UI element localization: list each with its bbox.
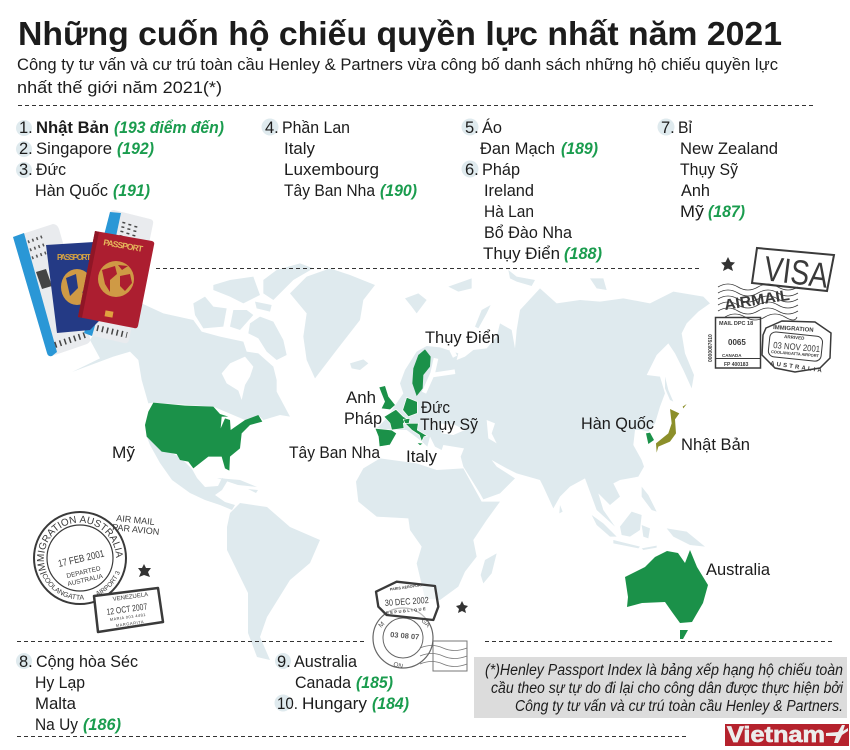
stamp: Venezuela: VENEZUELA <box>112 592 149 603</box>
stamp: 30 Dec 2002: PARIS AÉROPORT <box>389 582 424 592</box>
map: Italy <box>405 423 427 446</box>
stamp: air mail par avion: AIR MAIL <box>116 513 155 527</box>
stamp: air mail par avion <box>112 513 160 537</box>
intro text: nhất thế giới năm 2021(*) <box>17 79 222 97</box>
ranking list: 4: Luxembourg <box>284 161 379 179</box>
stamp: circular immigration Australia: DEPARTED <box>66 565 102 580</box>
stamp: Canada <box>708 318 760 368</box>
ranking list: 4 <box>262 118 417 200</box>
ranking list: 1 to 3: 2. <box>19 140 33 158</box>
icon: boarding passes and passports <box>13 210 154 356</box>
ranking list: 5 and 6: (189) <box>561 140 598 158</box>
ranking list: 9 and 10: Australia <box>294 653 358 671</box>
icon: blue passport: PASSPORT <box>57 253 91 262</box>
stamp: Venezuela: MARIA 003 4481 <box>109 612 147 622</box>
stamp: circular postmark: GA <box>420 617 432 630</box>
ranking list: 7: Mỹ <box>680 203 705 221</box>
map: Đức <box>403 397 417 417</box>
ranking list: 9 and 10: 10. <box>277 695 298 713</box>
map labels: Thụy Điển <box>425 329 500 347</box>
map labels: Nhật Bản <box>681 436 750 454</box>
ranking list: 1 to 3: Nhật Bản <box>36 119 109 137</box>
stamp: Venezuela <box>94 588 163 632</box>
ranking list: 9 and 10: 9. <box>277 653 291 671</box>
logo: Vietnam+ <box>725 722 849 747</box>
stamp: circular postmark: M <box>377 621 386 629</box>
stamp: AIRMAIL: AIRMAIL <box>723 287 791 314</box>
stamp: circular postmark: 03 08 07 <box>390 630 420 642</box>
ranking list: 1 to 3: 3. <box>19 161 33 179</box>
map: Mỹ <box>145 403 262 471</box>
ranking list: 1 to 3: Đức <box>36 161 66 179</box>
map labels: Pháp <box>344 410 382 428</box>
ranking list: 7: Bỉ <box>678 119 692 137</box>
ranking list: 1 to 3: Singapore <box>36 140 112 158</box>
ranking list: 4: Phần Lan <box>282 119 350 137</box>
map: European countries <box>375 349 687 453</box>
ranking list: 8: 8. <box>19 653 33 671</box>
ranking list: 5 and 6: Pháp <box>482 161 520 179</box>
ranking list: 1 to 3: 1. <box>19 119 33 137</box>
ranking list: 5 and 6: Áo <box>482 118 502 137</box>
map: Tây Ban Nha <box>375 428 397 447</box>
stamp: wavy postmark lines <box>718 284 798 320</box>
ranking list: 1 to 3: (193 điểm đến) <box>114 119 224 137</box>
ranking list: 1 to 3 <box>16 119 224 200</box>
stamp: 30 Dec 2002 <box>376 582 438 620</box>
map labels: Australia <box>706 561 771 579</box>
icon: star <box>138 564 151 577</box>
map: Greenland <box>290 268 375 378</box>
map: South America <box>227 503 320 660</box>
map: Africa and islands <box>356 458 563 600</box>
ranking list: 8: Hy Lạp <box>35 674 85 692</box>
stamp: Australia immigration: ARRIVED <box>784 334 805 341</box>
map labels <box>112 329 771 579</box>
icon: red passport <box>78 231 154 328</box>
icon: right boarding pass <box>84 210 153 343</box>
icon: red passport: PASSPORT <box>103 237 145 254</box>
map: Arctic Russian islands and Svalbard <box>405 270 673 402</box>
stamp: circular immigration Australia: AUSTRALIA <box>67 573 104 588</box>
stamp: VISA: VISA <box>762 249 831 296</box>
stamps: visa, airmail, Canada, Australia <box>708 248 834 374</box>
stamps: immigration Australia, air mail, Venezuela <box>33 511 164 634</box>
ranking list: 1 to 3: (191) <box>113 182 150 200</box>
ranking list: 4: (190) <box>380 182 417 200</box>
stamp: Venezuela: 12 OCT 2007 <box>106 601 148 617</box>
map: Thụy Điển <box>412 349 431 396</box>
map: Mexico and Central America <box>147 437 235 510</box>
map: Thụy Sỹ <box>403 418 410 423</box>
ranking list: 7 <box>658 118 778 221</box>
stamps: 30 Dec 2002, circular, wavy <box>373 582 468 671</box>
stamp: Australia immigration: IMMIGRATION <box>773 325 814 334</box>
ranking list: 5 and 6: 5. <box>465 119 479 137</box>
icon: star <box>456 601 468 613</box>
footnote box <box>474 657 847 718</box>
ranking list: 4: Tây Ban Nha <box>284 182 376 200</box>
ranking list: 8 <box>16 653 138 734</box>
stamp: Canada: FP 400183 <box>724 362 749 368</box>
ranking list: 9 and 10: (184) <box>372 695 409 713</box>
ranking list: 5 and 6: 6. <box>465 161 479 179</box>
map labels: Đức <box>421 399 450 417</box>
stamp: 30 Dec 2002: REPUBLIQUE <box>386 606 426 615</box>
stamp: circular immigration Australia: AIRPORT 3186 <box>96 571 120 594</box>
ranking list: 7: (187) <box>708 203 745 221</box>
stamp: Canada: 0065 <box>728 338 746 347</box>
stamp: circular immigration Australia <box>33 511 127 605</box>
ranking list: 9 and 10: (185) <box>356 674 393 692</box>
icon: left boarding pass <box>13 224 90 356</box>
stamp: Australia immigration: 03 NOV 2001 <box>773 340 821 354</box>
stamp: Australia immigration <box>762 321 831 374</box>
ranking list: 5 and 6: (188) <box>564 245 602 263</box>
ranking list: 9 and 10 <box>274 653 409 713</box>
map: Nhật Bản <box>656 404 687 453</box>
ranking list: 7: 7. <box>661 119 675 137</box>
stamp: air mail par avion: PAR AVION <box>112 522 160 537</box>
map: Hudson Bay <box>222 357 253 400</box>
stamp: circular postmark <box>373 608 433 671</box>
ranking list: 1 to 3: (192) <box>117 140 154 158</box>
ranking list: 8: Na Uy <box>35 716 79 734</box>
stamp: Canada: CANADA <box>722 353 742 358</box>
map: Caribbean <box>217 478 258 493</box>
ranking list: 8: Malta <box>35 695 77 713</box>
ranking list: 7: Anh <box>681 182 710 200</box>
map: Australia <box>625 550 708 639</box>
ranking list: 5 and 6 <box>462 118 602 263</box>
ranking list: 5 and 6: Thụy Điển <box>483 245 560 263</box>
ranking list: 5 and 6: Bổ Đào Nha <box>484 224 573 242</box>
map: Iceland <box>350 359 368 370</box>
stamp: circular immigration Australia: 17 FEB 2001 <box>57 549 106 570</box>
ranking list: 7: Thụy Sỹ <box>680 161 739 179</box>
ranking list: 7: New Zealand <box>680 140 778 158</box>
map labels: Tây Ban Nha <box>289 444 381 462</box>
ranking list: 1 to 3: Hàn Quốc <box>35 182 108 200</box>
stamp: Canada: MAIL DPC 18 <box>719 321 753 327</box>
title: Những cuốn hộ chiếu quyền lực nhất năm 2021 <box>18 15 782 52</box>
map: Southeast Asia islands <box>592 487 705 550</box>
ranking list: 9 and 10: Canada <box>295 674 352 692</box>
logo: Vietnam+: Vietnam <box>727 722 825 747</box>
stamp: circular immigration Australia: COOLANGATTA <box>42 574 84 600</box>
map labels: Italy <box>406 448 438 466</box>
ranking list: 8: Cộng hòa Séc <box>36 653 138 671</box>
ranking list: 4: 4. <box>265 119 279 137</box>
stamp: Canada: 0000087610 <box>708 334 714 362</box>
world map <box>72 263 710 660</box>
map: Anh <box>379 386 395 409</box>
ranking list: 8: (186) <box>83 716 121 734</box>
ranking list: 5 and 6: Ireland <box>484 182 534 200</box>
stamp: Venezuela: MARGARITA <box>115 619 144 628</box>
stamp: Australia immigration: AUSTRALIA <box>770 361 823 374</box>
ranking list: 4: Italy <box>284 140 316 158</box>
map labels: Hàn Quốc <box>581 415 654 433</box>
map: Pháp <box>384 409 408 430</box>
stamp: wavy postmark box <box>420 641 467 671</box>
map: Black Sea, Caspian, Baltic <box>440 420 497 443</box>
stamp: circular immigration Australia: IMMIGRATION AUSTRALIA <box>37 516 123 575</box>
map labels: Thụy Sỹ <box>420 416 479 434</box>
ranking list: 5 and 6: Hà Lan <box>484 203 534 221</box>
stamp: 30 Dec 2002: 30 DEC 2002 <box>384 595 429 608</box>
intro text: Công ty tư vấn và cư trú toàn cầu Henley & Partners vừa công bố danh sách những hộ chiếu quyền lực <box>17 56 778 74</box>
map: North America and arctic islands <box>72 263 375 420</box>
stamp: circular postmark: ON <box>392 661 404 671</box>
ranking list: 5 and 6: Đan Mạch <box>480 140 555 158</box>
icon: blue passport <box>46 242 100 333</box>
ranking list: 9 and 10: Hungary <box>302 695 368 713</box>
intro text <box>17 56 778 97</box>
map: Eurasia <box>375 288 710 527</box>
map labels: Mỹ <box>112 444 136 462</box>
map labels: Anh <box>346 389 376 407</box>
stamp: Australia immigration: COOLANGATTA AIRPORT <box>771 349 820 358</box>
icon: star <box>721 257 735 271</box>
map: Hàn Quốc <box>646 433 654 444</box>
